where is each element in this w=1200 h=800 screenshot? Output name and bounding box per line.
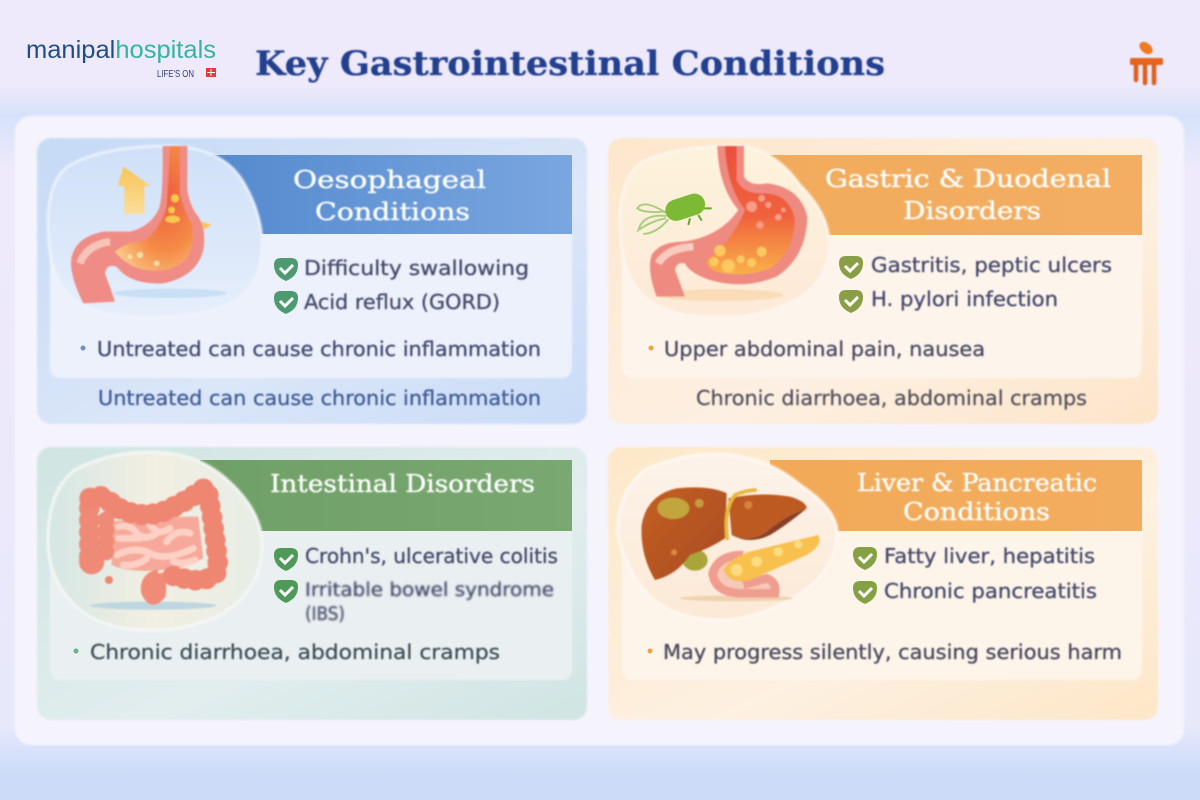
list item: Fatty liver, hepatitis [884, 544, 1095, 568]
heading: Conditions [315, 198, 470, 226]
list item: Irritable bowel syndrome [305, 580, 554, 601]
footer note: Chronic diarrhoea, abdominal cramps [696, 386, 1087, 410]
note: Untreated can cause chronic inflammation [97, 337, 541, 361]
logo: manipal hospitals [26, 36, 216, 80]
heading: Oesophageal [293, 166, 486, 194]
header band [200, 155, 572, 234]
heading: Disorders [903, 197, 1041, 225]
heading: Gastric & Duodenal [825, 165, 1111, 193]
heading: Intestinal Disorders [270, 470, 535, 498]
bullet [74, 648, 78, 654]
inner content panel [50, 226, 572, 378]
icon: check [274, 258, 298, 281]
heading: Liver & Pancreatic [857, 469, 1097, 497]
list item: Difficulty swallowing [304, 256, 529, 280]
panel: gastric and duodenal disorders [608, 138, 1158, 424]
inner content panel [622, 226, 1142, 378]
image bubble [48, 452, 262, 630]
bullet [648, 346, 654, 350]
illustration: stomach with reflux [71, 146, 227, 303]
bullet [80, 346, 86, 350]
icon: check [839, 290, 863, 313]
bullet [648, 648, 652, 654]
illustration: stomach with H. pylori [650, 146, 807, 301]
title: Key Gastrointestinal Conditions [255, 44, 885, 84]
list item: Acid reflux (GORD) [304, 290, 500, 314]
list item: (IBS) [305, 604, 345, 625]
icon: check [853, 547, 877, 570]
inner content panel [622, 520, 1142, 680]
image bubble [48, 146, 262, 317]
icon: check [839, 256, 863, 279]
header band [770, 155, 1142, 235]
logo: manipal hospitals: manipalhospitals [26, 36, 216, 64]
icon: check [274, 580, 298, 603]
panel: liver and pancreatic conditions [608, 447, 1158, 720]
list item [305, 580, 554, 625]
footer note: Untreated can cause chronic inflammation [98, 386, 541, 410]
icon: brand emblem [1130, 39, 1163, 83]
heading [293, 166, 486, 226]
icon: check [274, 548, 298, 571]
main panel [15, 116, 1184, 745]
icon: bacterium [637, 191, 712, 234]
inner content panel [50, 520, 572, 680]
note: Chronic diarrhoea, abdominal cramps [90, 640, 500, 664]
list item: Crohn's, ulcerative colitis [305, 544, 558, 568]
panel: oesophageal conditions [37, 138, 587, 424]
list item: H. pylori infection [871, 287, 1058, 311]
note: Upper abdominal pain, nausea [664, 337, 985, 361]
logo: manipal hospitals: LIFE'S ON [157, 69, 194, 80]
icon: check [853, 581, 877, 604]
image bubble [618, 454, 837, 620]
image bubble [620, 146, 829, 317]
heading: Conditions [903, 498, 1050, 526]
illustration: intestines [79, 487, 218, 610]
heading [857, 469, 1097, 526]
header band [770, 460, 1142, 531]
note: May progress silently, causing serious harm [663, 640, 1122, 664]
list item: Chronic pancreatitis [884, 579, 1097, 603]
illustration: liver and pancreas [641, 487, 819, 601]
list item: Gastritis, peptic ulcers [871, 253, 1112, 277]
icon: check [274, 291, 298, 314]
header band [200, 460, 572, 531]
heading [825, 165, 1111, 225]
panel: intestinal disorders [37, 447, 587, 720]
